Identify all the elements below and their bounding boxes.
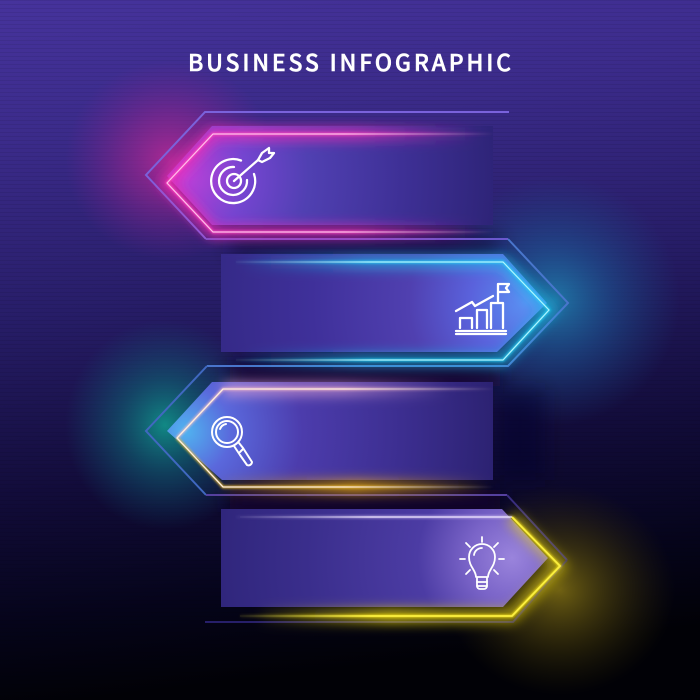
icon: growth chart with flag: [456, 284, 509, 334]
panel 3: magnifier: [167, 382, 493, 487]
panel 3 neon glow: [177, 389, 493, 487]
panel 4 body: [221, 509, 548, 607]
title: BUSINESS INFOGRAPHIC: [188, 44, 511, 78]
glow: pink: [65, 60, 275, 260]
panel 4: light bulb: [221, 509, 560, 616]
icon: magnifier: [212, 417, 252, 465]
panel 4 neon glow: [236, 517, 560, 616]
icon: target with arrow: [211, 148, 274, 203]
panel 1: target: [167, 126, 493, 232]
icon: light bulb: [460, 537, 504, 589]
outer connecting outline: [146, 112, 568, 622]
panel 2: growth chart: [221, 254, 549, 360]
panel 1 body: [167, 126, 493, 225]
glow: green: [65, 320, 265, 530]
glow: cyan: [430, 175, 680, 425]
panel 2 body: [221, 254, 547, 352]
panel 2 neon glow: [236, 262, 549, 360]
panel shadows: [230, 236, 545, 512]
glow: yellow: [445, 485, 675, 695]
panel 3 body: [167, 382, 493, 480]
panel 1 neon glow: [167, 134, 493, 232]
